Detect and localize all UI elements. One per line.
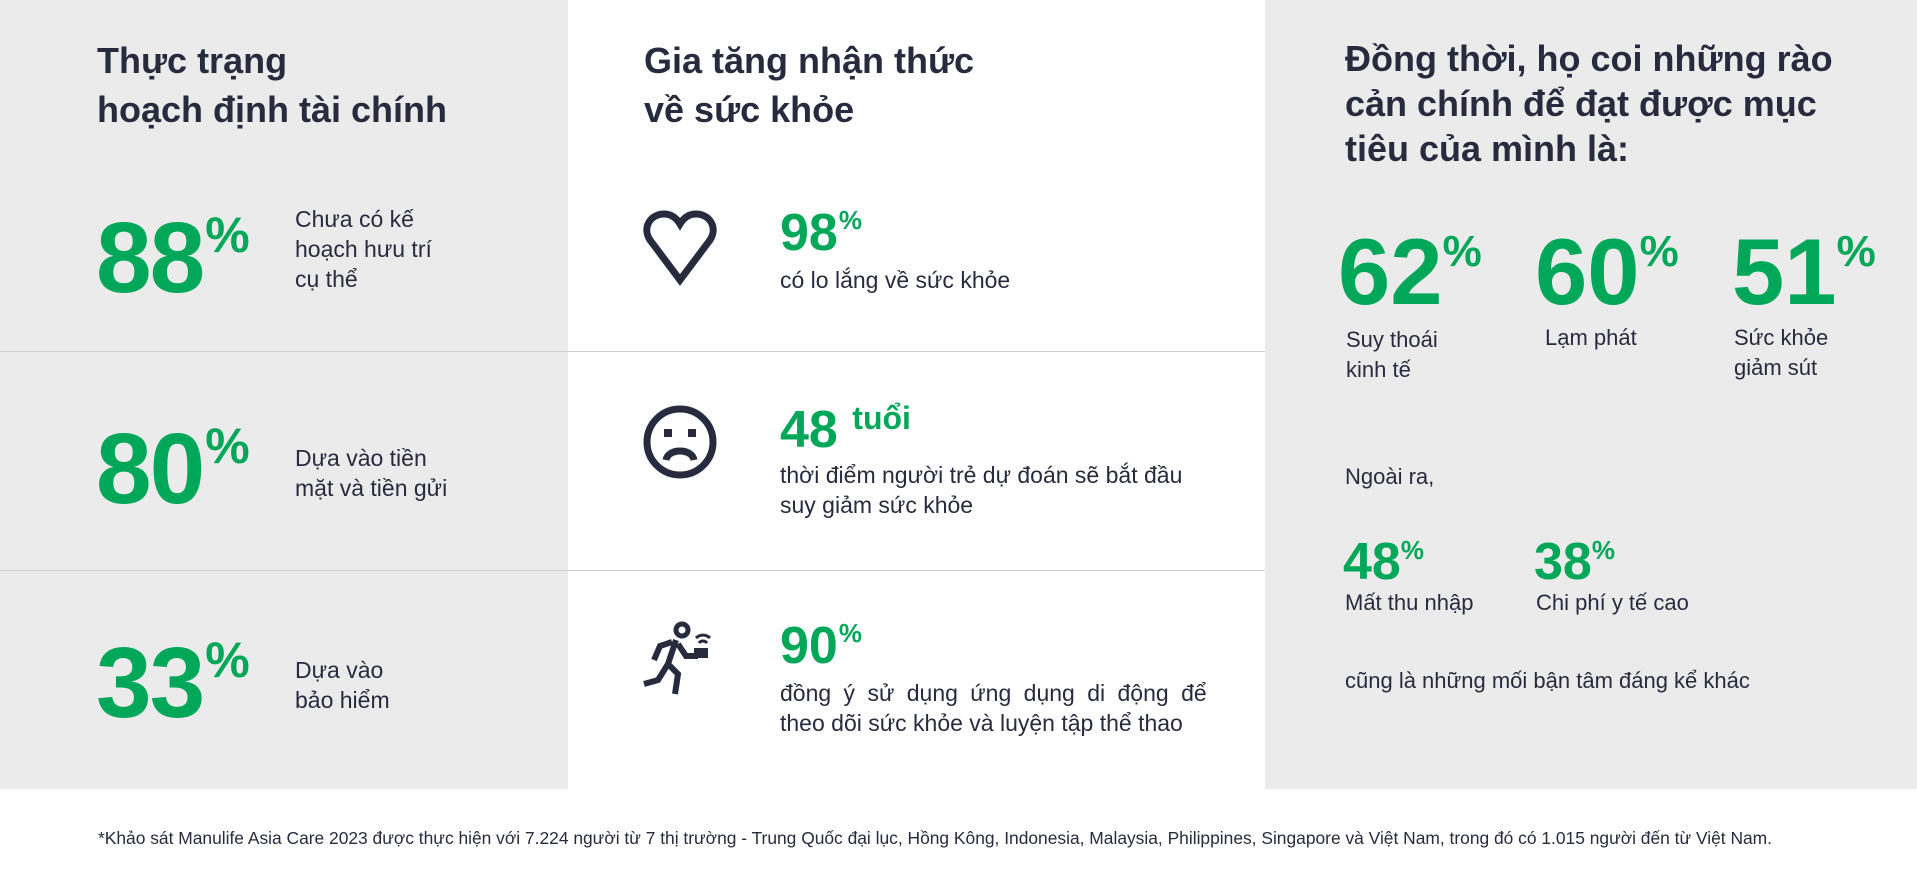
number 90%: 90% [780, 617, 862, 675]
text: 80%: mặt và tiền gửi [295, 475, 447, 501]
text: 88%: cụ thể [295, 266, 358, 292]
text: 80% [295, 445, 447, 501]
text: 62%: Suy thoái [1346, 327, 1438, 352]
text: 48 tuoi: thời điểm người trẻ dự đoán sẽ bắt đầu [780, 462, 1182, 488]
text: 48 tuoi [780, 462, 1182, 518]
number 38%: 38% [1534, 533, 1615, 591]
text: 62% [1346, 327, 1438, 382]
text: 33% [295, 657, 390, 713]
text: 88%: hoạch hưu trí [295, 236, 432, 262]
number 48 tuoi: 48 tuổi [780, 400, 911, 459]
text: 90%: đồng ý sử dụng ứng dụng di động để [780, 680, 1207, 706]
text: 88% [295, 206, 432, 292]
number 88%: 88% [96, 202, 250, 314]
stat 48% [1343, 533, 1473, 615]
stat 80% [96, 413, 447, 525]
stat 60% [1535, 219, 1679, 350]
text: 48%: Mất thu nhập [1345, 590, 1473, 615]
text: 80%: Dựa vào tiền [295, 445, 427, 471]
text: 88%: Chưa có kế [295, 206, 414, 232]
icon: heart [643, 210, 717, 286]
heading: financial planning: Thực trạng [97, 40, 287, 81]
number 80%: 80% [96, 413, 250, 525]
heading: health awareness: về sức khỏe [644, 89, 854, 130]
text: Ngoai ra: Ngoài ra, [1345, 464, 1434, 489]
stat 48 tuoi [780, 400, 1182, 518]
number 98%: 98% [780, 204, 862, 262]
text: 33%: Dựa vào [295, 657, 383, 683]
text: 51% [1734, 325, 1828, 380]
text: 51%: Sức khỏe [1734, 325, 1828, 350]
text: 60%: Lạm phát [1545, 325, 1637, 350]
panel: financial planning [0, 0, 568, 789]
text: 62%: kinh tế [1346, 357, 1411, 382]
text: 51%: giảm sút [1734, 355, 1817, 380]
number 51%: 51% [1732, 219, 1876, 324]
stat 90% [780, 617, 1207, 736]
stat 62% [1338, 219, 1482, 382]
text: 33%: bảo hiểm [295, 687, 390, 713]
heading: barriers: Đồng thời, họ coi những rào [1345, 38, 1833, 79]
heading: health awareness [644, 40, 974, 130]
heading: barriers: cản chính để đạt được mục [1345, 83, 1817, 124]
heading: financial planning [97, 40, 447, 130]
number 33%: 33% [96, 627, 250, 739]
stat 98% [780, 204, 1010, 293]
heading: health awareness: Gia tăng nhận thức [644, 40, 974, 81]
footnote: *Khảo sát Manulife Asia Care 2023 được thực hiện với 7.224 người từ 7 thị trường - Trung Quốc đại lục, Hồng Kông, Indonesia, Malaysia, Philippines, Singapore và Việt Nam, trong đó có 1.015 người đến từ Việt Nam. [98, 828, 1772, 848]
number 60%: 60% [1535, 219, 1679, 324]
text: 98%: có lo lắng về sức khỏe [780, 267, 1010, 293]
number 62%: 62% [1338, 219, 1482, 324]
text: other concerns: cũng là những mối bận tâm đáng kể khác [1345, 668, 1750, 693]
stat 88% [96, 202, 432, 314]
heading: barriers [1345, 38, 1833, 169]
text: 90%: theo dõi sức khỏe và luyện tập thể thao [780, 710, 1183, 736]
icon: sad face [644, 406, 716, 478]
text: 48 tuoi: suy giảm sức khỏe [780, 492, 973, 518]
text: 90% [780, 680, 1207, 736]
stat 38% [1534, 533, 1689, 615]
icon: runner with phone [643, 622, 711, 694]
panel: barriers [1265, 0, 1917, 789]
heading: barriers: tiêu của mình là: [1345, 128, 1629, 169]
heading: financial planning: hoạch định tài chính [97, 89, 447, 130]
stat 51% [1732, 219, 1876, 380]
text: 38%: Chi phí y tế cao [1536, 590, 1689, 615]
stat 33% [96, 627, 390, 739]
number 48%: 48% [1343, 533, 1424, 591]
